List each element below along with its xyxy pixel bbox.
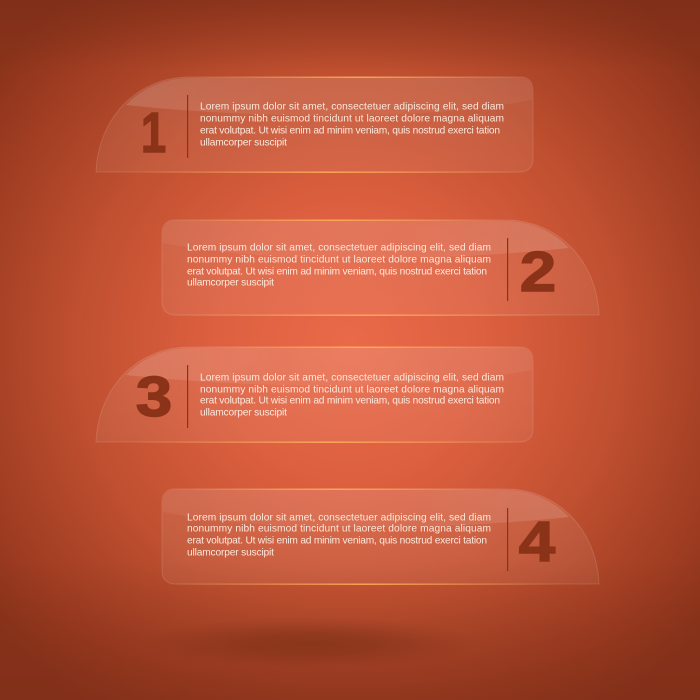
glass banner 2	[162, 220, 599, 315]
gold edges 4	[165, 488, 565, 585]
text block 4: nonummy nibh euismod tincidunt ut laoreet dolore magna aliquam	[187, 524, 491, 534]
text block 2: ullamcorper suscipit	[187, 278, 274, 288]
gold edges 3	[130, 346, 530, 443]
sheen 1	[126, 78, 532, 116]
panel 2	[162, 220, 599, 316]
text block 2: nonummy nibh euismod tincidunt ut laoreet dolore magna aliquam	[187, 254, 491, 266]
text block 2: Lorem ipsum dolor sit amet, consectetuer adipiscing elit, sed diam	[187, 242, 491, 254]
divider 3	[187, 365, 188, 428]
text block 3: erat volutpat. Ut wisi enim ad minim veniam, quis nostrud exerci tation	[200, 396, 500, 406]
floor shadow	[140, 617, 480, 669]
number 1: 1	[141, 100, 166, 164]
panel 4	[162, 488, 599, 585]
number 2: 2	[520, 240, 556, 304]
text block 3: ullamcorper suscipit	[200, 408, 287, 418]
sheen 2	[163, 221, 569, 259]
text block 4: ullamcorper suscipit	[187, 548, 274, 558]
gold edges 2	[165, 220, 565, 316]
panel 1	[96, 76, 533, 173]
text block 1: Lorem ipsum dolor sit amet, consectetuer adipiscing elit, sed diam	[200, 102, 504, 112]
text block 4: Lorem ipsum dolor sit amet, consectetuer adipiscing elit, sed diam	[187, 512, 491, 524]
text block 1: ullamcorper suscipit	[200, 138, 287, 148]
glass banner 1	[96, 77, 533, 172]
divider 4	[507, 508, 508, 571]
divider 2	[507, 238, 508, 301]
glass banner 3	[96, 347, 533, 442]
text block 3: nonummy nibh euismod tincidunt ut laoreet dolore magna aliquam	[200, 384, 504, 396]
text block 3: Lorem ipsum dolor sit amet, consectetuer adipiscing elit, sed diam	[200, 372, 504, 384]
gold edges 1	[130, 76, 530, 173]
text block 2: erat volutpat. Ut wisi enim ad minim veniam, quis nostrud exerci tation	[187, 266, 487, 278]
text block 1: erat volutpat. Ut wisi enim ad minim veniam, quis nostrud exerci tation	[200, 126, 500, 136]
number 4: 4	[519, 510, 555, 574]
text block 4: erat volutpat. Ut wisi enim ad minim veniam, quis nostrud exerci tation	[187, 536, 487, 546]
sheen 4	[163, 490, 569, 528]
panel 3	[96, 346, 533, 443]
sheen 3	[126, 348, 532, 386]
number 3: 3	[136, 365, 172, 429]
divider 1	[187, 95, 188, 158]
text block 1: nonummy nibh euismod tincidunt ut laoreet dolore magna aliquam	[200, 114, 504, 124]
glass banner 4	[162, 489, 599, 584]
